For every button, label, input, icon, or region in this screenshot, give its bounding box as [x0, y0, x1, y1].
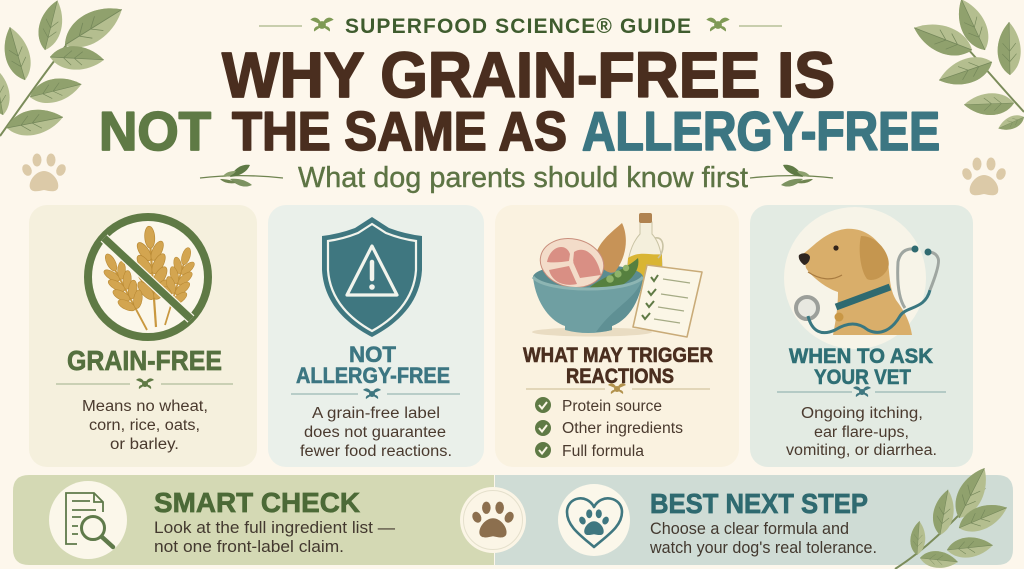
text: best next step description: Choose a clear formula and	[650, 519, 849, 538]
text: best next step description: watch your dog's real tolerance.	[649, 538, 877, 557]
stethoscope	[796, 246, 939, 333]
heading: when to ask your vet	[789, 344, 933, 389]
panel: what may trigger reactions	[495, 205, 739, 467]
panel: when to ask your vet	[750, 205, 973, 467]
icon: heart with paw	[558, 484, 630, 556]
mouth	[808, 272, 842, 279]
sweet potato	[595, 223, 626, 273]
heading: not allergy-free: ALLERGY-FREE	[296, 363, 450, 388]
title	[99, 39, 940, 162]
heading: grain-free: GRAIN-FREE	[67, 345, 222, 376]
heading: what may trigger reactions	[523, 344, 713, 388]
text: grain-free description: or barley.	[110, 436, 179, 453]
text: best next step description	[649, 519, 877, 557]
divider ornament	[777, 386, 946, 397]
icon: dog with stethoscope	[784, 207, 939, 349]
ham slice	[536, 233, 608, 293]
panel: best next step	[495, 462, 1013, 569]
dog ear	[860, 236, 889, 280]
oil bottle	[627, 213, 663, 285]
subtitle: What dog parents should know first	[298, 162, 748, 194]
collar	[836, 287, 890, 307]
heading: when to ask your vet: YOUR VET	[814, 365, 911, 389]
heading: when to ask your vet: WHEN TO ASK	[789, 344, 933, 368]
text: vet description: Ongoing itching,	[801, 405, 923, 422]
icon: warning shield	[322, 217, 422, 337]
leaf branch: top right	[909, 0, 1024, 134]
pea pod	[589, 258, 638, 290]
paw print: top left	[20, 154, 68, 191]
title: NOT	[99, 100, 211, 162]
bowl inner rim	[533, 264, 643, 290]
heading: not allergy-free	[296, 342, 450, 388]
heading: best next step: BEST NEXT STEP	[650, 488, 868, 519]
center paw badge	[460, 487, 526, 553]
text: vet description	[786, 405, 937, 459]
title: THE SAME AS	[232, 100, 567, 162]
text: grain-free description: Means no wheat,	[82, 398, 208, 415]
dog body	[803, 229, 912, 335]
icon: food bowl with checklist	[532, 213, 702, 337]
text: not allergy-free description: fewer food reactions.	[300, 443, 452, 460]
heading: not allergy-free: NOT	[349, 342, 396, 367]
heading: what may trigger reactions: WHAT MAY TRIGGER	[523, 344, 713, 367]
checklist card	[633, 265, 702, 337]
dog eye and nose	[833, 245, 839, 251]
text: smart check description: Look at the full ingredient list —	[154, 518, 395, 537]
paw print: top right	[960, 158, 1008, 195]
checklist: Full formula	[562, 443, 644, 460]
text: grain-free description: corn, rice, oats,	[89, 417, 200, 434]
text: not allergy-free description: does not guarantee	[304, 424, 446, 441]
text: smart check description	[154, 518, 395, 556]
checklist: Protein source	[562, 398, 662, 415]
icon: document with magnifier	[49, 481, 127, 559]
leaf branch: bottom right	[895, 462, 1011, 569]
divider ornament	[56, 378, 233, 389]
panel: grain-free	[29, 205, 257, 467]
heading: smart check: SMART CHECK	[154, 487, 360, 518]
text: not allergy-free description: A grain-free label	[312, 405, 440, 422]
text: vet description: vomiting, or diarrhea.	[786, 442, 937, 459]
divider ornament	[526, 383, 710, 394]
text: grain-free description	[82, 398, 208, 453]
checklist	[535, 397, 683, 460]
bowl	[533, 277, 643, 333]
text: smart check description: not one front-label claim.	[154, 537, 344, 556]
text: vet description: ear flare-ups,	[814, 424, 909, 441]
text: not allergy-free description	[300, 405, 452, 460]
eyebrow heading	[259, 15, 782, 38]
panel: smart check	[13, 475, 494, 565]
leaf branch: top left	[0, 0, 129, 140]
eyebrow heading: SUPERFOOD SCIENCE® GUIDE	[345, 15, 691, 38]
divider ornament	[291, 388, 460, 399]
title: WHY GRAIN-FREE IS	[222, 39, 835, 111]
title: ALLERGY-FREE	[582, 100, 940, 162]
icon: crossed-out wheat	[88, 217, 208, 337]
heading: what may trigger reactions: REACTIONS	[566, 365, 674, 388]
checklist: Other ingredients	[562, 420, 683, 437]
panel: not allergy-free	[268, 205, 484, 467]
